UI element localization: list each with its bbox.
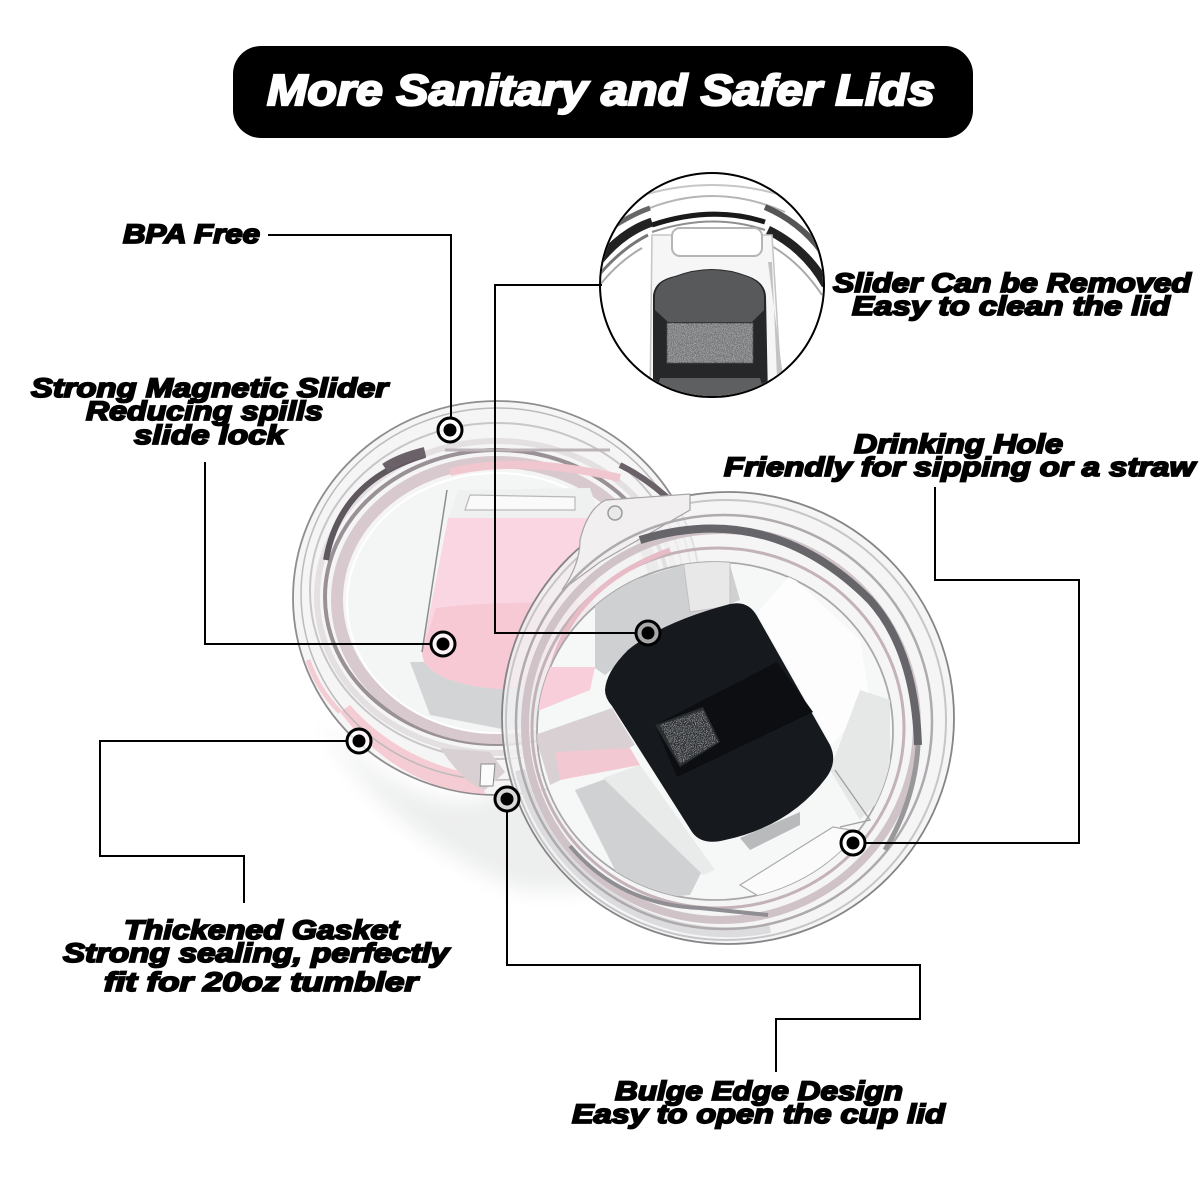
title banner: More Sanitary and Safer Lids bbox=[267, 66, 935, 115]
label: Thickened Gasket: Strong sealing, perfectly bbox=[63, 938, 451, 968]
marker: drinking hole bbox=[841, 831, 865, 855]
label: Slider Can be Removed bbox=[833, 268, 1192, 321]
black slider bbox=[605, 603, 833, 842]
lid interior shading bbox=[535, 560, 890, 915]
slider channel and pink slider bbox=[410, 662, 503, 729]
label: Thickened Gasket bbox=[63, 915, 451, 997]
front lid with black slider bbox=[502, 492, 954, 944]
label: Bulge Edge Design: Easy to open the cup lid bbox=[572, 1099, 946, 1129]
label: Drinking Hole bbox=[724, 429, 1197, 482]
marker: BPA Free bbox=[438, 418, 462, 442]
gasket band bbox=[340, 705, 485, 794]
label: Strong Magnetic Slider: Strong Magnetic Slider bbox=[31, 373, 390, 403]
label: Thickened Gasket: fit for 20oz tumbler bbox=[104, 967, 420, 997]
marker: removable slider bbox=[636, 621, 660, 645]
label: Strong Magnetic Slider: Reducing spills bbox=[86, 396, 323, 426]
label: Slider Can be Removed: Easy to clean the lid bbox=[852, 291, 1171, 321]
soft shadow under the lids bbox=[320, 720, 600, 890]
label: Slider Can be Removed: Slider Can be Removed bbox=[833, 268, 1192, 298]
leader line: drinking hole bbox=[866, 487, 1079, 843]
hinge tab bbox=[562, 494, 690, 590]
leader line: bulge edge bbox=[507, 812, 920, 1072]
marker: magnetic slider bbox=[431, 632, 455, 656]
leader line: magnetic slider bbox=[205, 462, 430, 644]
leader line: BPA Free bbox=[268, 235, 451, 418]
label: BPA Free: BPA Free bbox=[123, 219, 260, 249]
label: Strong Magnetic Slider bbox=[31, 373, 390, 450]
back lid with pink slider bbox=[293, 401, 701, 890]
label: Drinking Hole: Friendly for sipping or a straw bbox=[724, 452, 1197, 482]
label: Bulge Edge Design bbox=[572, 1076, 946, 1129]
marker: gasket bbox=[347, 729, 371, 753]
bulge edge tab bbox=[440, 748, 505, 790]
marker: bulge edge bbox=[495, 787, 519, 811]
label: Strong Magnetic Slider: slide lock bbox=[134, 420, 287, 450]
inset circle: removable slider detail bbox=[598, 173, 826, 400]
label: Bulge Edge Design: Bulge Edge Design bbox=[615, 1076, 903, 1106]
leader line: removable slider bbox=[495, 285, 637, 633]
label: Drinking Hole: Drinking Hole bbox=[854, 429, 1063, 459]
label: Thickened Gasket: Thickened Gasket bbox=[124, 915, 400, 945]
leader line: gasket bbox=[100, 741, 346, 903]
title banner bbox=[233, 46, 973, 138]
